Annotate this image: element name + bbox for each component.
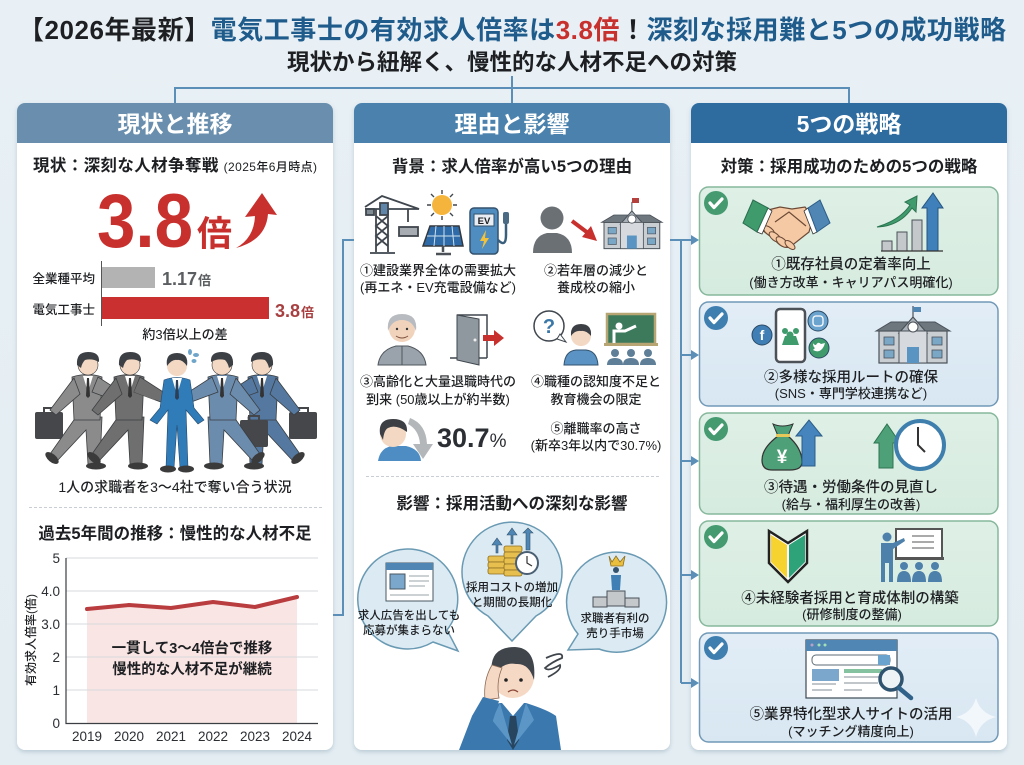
sub heading: 現状：深刻な人材争奪戦 (2025年6月時点) — [33, 155, 317, 175]
panel header — [691, 103, 1007, 143]
icon: EV charger: EV — [478, 216, 491, 227]
line chart: 有効求人倍率(倍) — [23, 594, 38, 686]
caption 5: ⑤離職率の高さ — [550, 421, 642, 436]
impact heading: 影響：採用活動への深刻な影響 — [396, 493, 628, 513]
icon: money bag — [762, 424, 802, 470]
check icon — [704, 306, 728, 330]
check icon — [704, 525, 728, 549]
card 5 text — [750, 706, 952, 739]
connector: left to middle panel — [333, 240, 354, 615]
icon: EV charger — [470, 208, 509, 254]
card 3 text — [764, 479, 938, 512]
line chart: 2024 — [282, 729, 313, 744]
panel: current state — [17, 103, 333, 750]
icon: young workforce decline — [533, 206, 597, 253]
card 2 text: (SNS・専門学校連携など) — [775, 386, 927, 401]
check icon — [704, 191, 728, 215]
card 5 text: (マッチング精度向上) — [788, 724, 914, 739]
bubble: no applicants — [358, 549, 460, 651]
line chart: 0 — [52, 716, 60, 731]
icon: money bag: ¥ — [777, 447, 788, 468]
stat: 30.7%: 30.7% — [437, 423, 507, 453]
panel heading: 理由と影響 — [454, 111, 570, 137]
subtitle: 現状から紐解く、慢性的な人材不足への対策 — [287, 50, 737, 75]
card 4 text — [741, 589, 959, 622]
card 1: retention — [700, 187, 998, 295]
icon: instructor and students — [881, 529, 944, 582]
bar chart comparison: 3.8倍 — [275, 301, 314, 321]
bubble: rising cost: 採用コストの増加 — [466, 580, 558, 594]
icon: classroom blackboard — [604, 314, 658, 365]
caption 4: 教育機会の限定 — [550, 392, 642, 407]
card 2 text — [764, 368, 938, 401]
icon: clock — [896, 421, 944, 469]
panel header — [17, 103, 333, 143]
line chart: 4.0 — [41, 584, 60, 599]
line chart — [23, 551, 318, 744]
panel: reasons and impact — [354, 103, 670, 750]
line chart: 1 — [52, 683, 60, 698]
icon: beginner mark — [769, 531, 807, 582]
card 5: job sites — [700, 633, 998, 742]
icon: growth chart — [877, 193, 943, 251]
icon: smartphone with social — [752, 309, 829, 362]
line chart: 2019 — [72, 729, 102, 744]
card 5 text: ⑤業界特化型求人サイトの活用 — [750, 706, 952, 723]
card 2: recruiting routes — [700, 302, 998, 406]
icon: handshake — [743, 200, 830, 251]
card 3 text: (給与・福利厚生の改善) — [782, 497, 920, 512]
bubble: rising cost: と期間の長期化 — [472, 596, 553, 609]
line chart: 一貫して3～4倍台で推移 — [112, 639, 273, 657]
panel heading: 現状と推移 — [118, 111, 232, 137]
sparkle watermark — [956, 698, 996, 737]
icon: up arrow — [236, 193, 277, 248]
panel header — [354, 103, 670, 143]
caption 1: (再エネ・EV充電設備など) — [360, 280, 516, 295]
line chart: 2021 — [156, 729, 186, 744]
caption 3 — [360, 374, 516, 407]
card 1 text — [749, 256, 953, 290]
big number: 3.8 — [97, 179, 193, 264]
caption 2 — [544, 263, 648, 295]
line chart: 2 — [52, 650, 60, 665]
line chart: 5 — [52, 551, 60, 566]
caption 5: (新卒3年以内で30.7%) — [531, 438, 661, 453]
caption 4 — [531, 374, 661, 407]
check icon — [704, 417, 728, 441]
bubble: no applicants: 求人広告を出しても — [358, 608, 460, 622]
icon: browser with magnifier — [806, 640, 911, 698]
bubble: no applicants: 応募が集まらない — [363, 623, 455, 637]
caption 3: 到来 (50歳以上が約半数) — [366, 392, 510, 407]
bar note: 約3倍以上の差 — [142, 327, 228, 342]
check icon — [704, 636, 728, 660]
caption 5 — [531, 421, 661, 453]
caption 1 — [360, 263, 516, 295]
trend heading: 過去5年間の推移：慢性的な人材不足 — [38, 523, 312, 543]
card 2 text: ②多様な採用ルートの確保 — [764, 368, 938, 386]
caption 2: ②若年層の減少と — [544, 263, 648, 278]
icon: question bubble and worker: ? — [543, 316, 555, 338]
card 4: inexperienced hiring — [700, 521, 998, 626]
big number: 倍 — [197, 215, 232, 254]
connector: middle to strategies with arrows — [670, 235, 699, 688]
caption 4: ④職種の認知度不足と — [531, 374, 661, 389]
icon: green up arrow — [874, 424, 900, 468]
line chart: 2023 — [240, 729, 270, 744]
sub heading: 対策：採用成功のための5つの戦略 — [721, 156, 978, 176]
card 4 text: ④未経験者採用と育成体制の構築 — [741, 589, 959, 607]
illustration: worried manager — [459, 647, 562, 750]
line chart: 3.0 — [41, 617, 60, 632]
icon: worker with down arrow — [378, 418, 433, 461]
illustration: companies competing for a job seeker — [35, 349, 317, 472]
panel heading: 5つの戦略 — [797, 111, 901, 137]
bar chart comparison: 1.17倍 — [162, 269, 211, 289]
icon: crane — [365, 196, 419, 253]
title: 【2026年最新】電気工事士の有効求人倍率は3.8倍！深刻な採用難と5つの成功戦略 — [18, 15, 1006, 45]
icon: school — [876, 306, 950, 363]
icon: older worker — [378, 314, 426, 365]
card 3: compensation — [700, 413, 998, 514]
card 4 text: (研修制度の整備) — [802, 607, 902, 622]
card 1 text: (働き方改革・キャリアパス明確化) — [749, 275, 953, 290]
bar chart comparison — [32, 261, 314, 326]
bubble: seller's market: 求職者有利の — [580, 611, 650, 625]
panel: strategies — [691, 103, 1007, 750]
icon: smartphone with social: f — [760, 327, 765, 343]
bubble: rising cost — [462, 522, 562, 641]
card 1 text: ①既存社員の定着率向上 — [771, 256, 931, 273]
icon: question bubble and worker — [534, 311, 598, 365]
bar chart comparison: 電気工事士 — [32, 302, 95, 317]
card 3 text: ③待遇・労働条件の見直し — [764, 479, 938, 496]
icon: door and exit arrow — [450, 315, 504, 365]
bar chart comparison: 全業種平均 — [32, 271, 95, 286]
bubble: seller's market: 売り手市場 — [586, 626, 644, 640]
connector: title to three columns — [175, 76, 849, 103]
sub heading: 背景：求人倍率が高い5つの理由 — [392, 156, 632, 176]
line chart: 2022 — [198, 729, 228, 744]
icon: solar panel — [423, 226, 463, 254]
icon: blue up arrow — [796, 420, 822, 466]
bubble: seller's market — [567, 552, 667, 652]
line chart: 2020 — [114, 729, 144, 744]
caption 3: ③高齢化と大量退職時代の — [360, 374, 516, 389]
icon: sun — [427, 190, 457, 220]
line chart: 慢性的な人材不足が継続 — [112, 660, 272, 678]
caption 1: ①建設業界全体の需要拡大 — [360, 263, 516, 278]
icon: school — [602, 198, 662, 249]
caption 2: 養成校の縮小 — [557, 280, 635, 295]
illustration caption: 1人の求職者を3～4社で奪い合う状況 — [58, 479, 292, 495]
